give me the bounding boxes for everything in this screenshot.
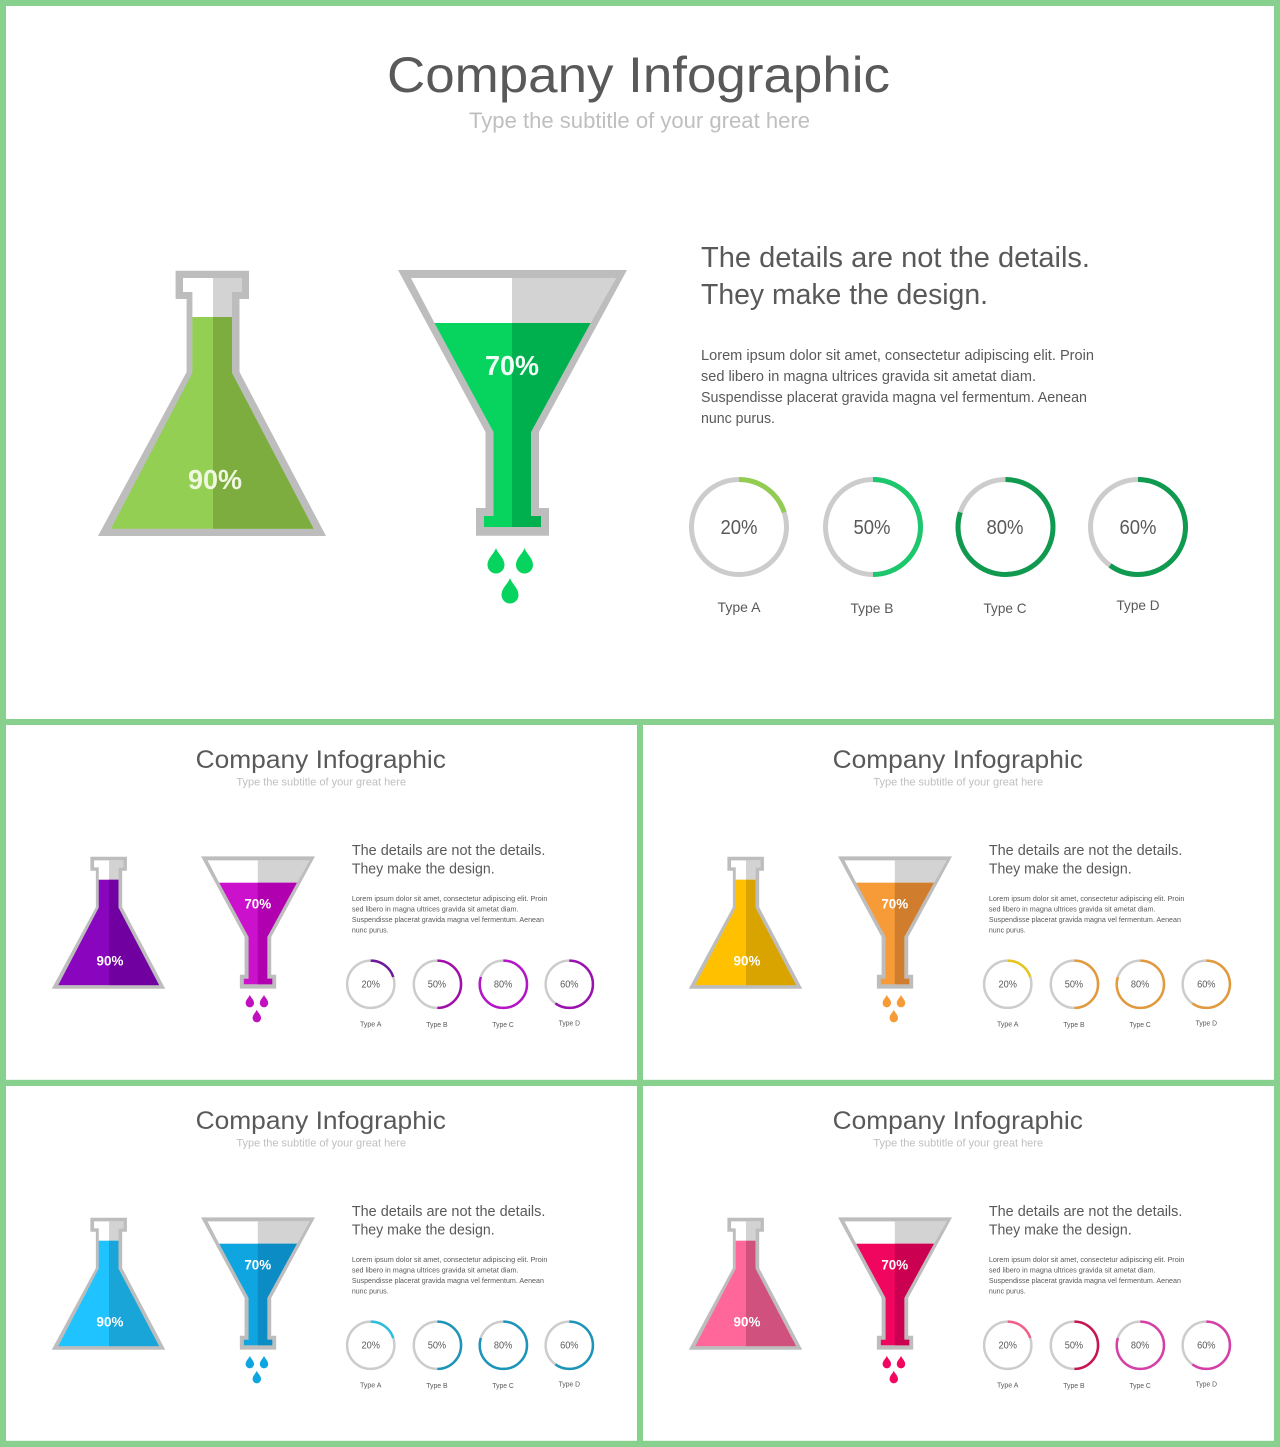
- ring: Type D: Type D: [1196, 1382, 1217, 1389]
- title: Company Infographic: [833, 746, 1083, 774]
- ring: Type C: Type C: [984, 600, 1026, 616]
- body text: nunc purus.: [989, 925, 1026, 934]
- heading: [352, 1204, 545, 1238]
- ring: Type D: 60%: [1197, 1341, 1216, 1352]
- heading: [352, 843, 545, 877]
- icon: flask 90%: [52, 1218, 165, 1350]
- ring: Type A: Type A: [997, 1022, 1019, 1029]
- ring: Type D: [1183, 961, 1230, 1028]
- ring: Type C: [1117, 961, 1164, 1029]
- heading: [989, 843, 1182, 877]
- body text: nunc purus.: [352, 925, 389, 934]
- ring: Type B: Type B: [426, 1383, 448, 1390]
- icon: flask 90%: [689, 1218, 802, 1350]
- icon: flask 90%: [689, 857, 802, 989]
- ring: Type B: 50%: [854, 517, 891, 539]
- ring: Type D: [546, 1322, 593, 1389]
- ring: Type A: 20%: [999, 980, 1017, 991]
- icon: flask 90%: [98, 271, 326, 536]
- ring: Type B: 50%: [1065, 980, 1083, 991]
- title: Company Infographic: [196, 1107, 446, 1135]
- heading: They make the design.: [701, 279, 988, 311]
- title: Company Infographic: [833, 1107, 1083, 1135]
- ring: Type B: 50%: [428, 1341, 446, 1352]
- ring: Type C: Type C: [1129, 1383, 1151, 1390]
- icon: funnel 70%: 70%: [881, 1257, 909, 1273]
- icon: drops: [246, 995, 268, 1022]
- body text: [352, 1255, 547, 1295]
- body text: Lorem ipsum dolor sit amet, consectetur adipiscing elit. Proin: [352, 894, 547, 903]
- icon: funnel 70%: 70%: [881, 896, 909, 912]
- heading: The details are not the details.: [989, 1204, 1182, 1220]
- subtitle: Type the subtitle of your great here: [873, 777, 1043, 789]
- ring: Type C: [480, 961, 527, 1029]
- heading: They make the design.: [352, 861, 495, 877]
- body text: Lorem ipsum dolor sit amet, consectetur adipiscing elit. Proin: [352, 1255, 547, 1264]
- icon: funnel 70%: [838, 856, 952, 989]
- title: Company Infographic: [196, 746, 446, 774]
- heading: They make the design.: [352, 1222, 495, 1238]
- body text: Lorem ipsum dolor sit amet, consectetur adipiscing elit. Proin: [989, 1255, 1184, 1264]
- ring: Type C: [958, 480, 1053, 616]
- body text: nunc purus.: [352, 1286, 389, 1295]
- icon: funnel 70%: [201, 856, 315, 989]
- ring: Type A: [692, 480, 786, 615]
- body text: nunc purus.: [989, 1286, 1026, 1295]
- ring: Type B: Type B: [1063, 1383, 1085, 1390]
- subtitle: Type the subtitle of your great here: [873, 1138, 1043, 1150]
- ring: Type C: Type C: [1129, 1022, 1151, 1029]
- ring: Type A: Type A: [997, 1383, 1019, 1390]
- body text: [989, 894, 1184, 934]
- ring: Type C: [1117, 1322, 1164, 1390]
- icon: drops: [883, 995, 905, 1022]
- ring: Type C: 80%: [986, 517, 1024, 539]
- icon: flask 90%: [52, 857, 165, 989]
- icon: flask 90%: 90%: [734, 952, 761, 968]
- ring: Type D: [1090, 480, 1186, 613]
- title: Company Infographic: [387, 47, 890, 103]
- body text: sed libero in magna ultrices gravida sit ametat diam.: [989, 905, 1156, 914]
- icon: funnel 70%: [398, 270, 627, 536]
- body text: Suspendisse placerat gravida magna vel fermentum. Aenean: [352, 1276, 544, 1285]
- ring: Type D: Type D: [1196, 1021, 1217, 1028]
- ring: Type D: Type D: [1116, 597, 1160, 613]
- ring: Type C: 80%: [1131, 1341, 1149, 1352]
- ring: Type A: Type A: [718, 599, 761, 615]
- ring: Type B: [1051, 961, 1098, 1029]
- subtitle: Type the subtitle of your great here: [236, 1138, 406, 1150]
- body text: Lorem ipsum dolor sit amet, consectetur adipiscing elit. Proin: [989, 894, 1184, 903]
- heading: The details are not the details.: [352, 1204, 545, 1220]
- icon: flask 90%: 90%: [97, 1313, 124, 1329]
- ring: Type B: [1051, 1322, 1098, 1390]
- ring: Type A: [347, 961, 394, 1029]
- icon: water drops: [488, 548, 533, 604]
- body text: sed libero in magna ultrices gravida sit ametat diam.: [352, 905, 519, 914]
- body text: nunc purus.: [701, 411, 775, 427]
- ring: Type C: 80%: [494, 980, 512, 991]
- icon: funnel 70%: 70%: [244, 1257, 272, 1273]
- ring: Type D: 60%: [560, 1341, 579, 1352]
- heading: The details are not the details.: [989, 843, 1182, 859]
- heading: The details are not the details.: [352, 843, 545, 859]
- ring: Type B: [414, 961, 461, 1029]
- heading: [989, 1204, 1182, 1238]
- panel: purple slide: [6, 725, 637, 1080]
- body text: [352, 894, 547, 934]
- heading: [701, 242, 1090, 311]
- body text: sed libero in magna ultrices gravida sit ametat diam.: [701, 369, 1036, 385]
- panel: orange slide: [643, 725, 1274, 1080]
- ring: Type D: [546, 961, 593, 1028]
- heading: They make the design.: [989, 1222, 1132, 1238]
- ring: Type A: 20%: [362, 980, 380, 991]
- body text: Suspendisse placerat gravida magna vel fermentum. Aenean: [989, 915, 1181, 924]
- icon: funnel 70%: 70%: [485, 350, 539, 381]
- subtitle: Type the subtitle of your great here: [469, 108, 810, 133]
- icon: drops: [246, 1356, 268, 1383]
- ring: Type D: 60%: [1197, 980, 1216, 991]
- ring: Type D: 60%: [1120, 517, 1157, 539]
- ring: Type A: Type A: [360, 1383, 382, 1390]
- ring: Type C: Type C: [492, 1383, 514, 1390]
- heading: The details are not the details.: [701, 242, 1090, 274]
- icon: funnel 70%: 70%: [244, 896, 272, 912]
- ring: Type A: 20%: [999, 1341, 1017, 1352]
- subtitle: Type the subtitle of your great here: [236, 777, 406, 789]
- ring: Type A: [984, 961, 1031, 1029]
- icon: drops: [883, 1356, 905, 1383]
- ring: Type A: 20%: [720, 517, 758, 539]
- body text: [989, 1255, 1184, 1295]
- ring: Type B: [826, 480, 920, 616]
- ring: Type C: 80%: [1131, 980, 1149, 991]
- ring: Type D: Type D: [559, 1021, 580, 1028]
- ring: Type B: Type B: [1063, 1022, 1085, 1029]
- body text: Suspendisse placerat gravida magna vel fermentum. Aenean: [352, 915, 544, 924]
- panel: pink slide: [643, 1086, 1274, 1441]
- icon: flask 90%: 90%: [734, 1313, 761, 1329]
- ring: Type C: Type C: [492, 1022, 514, 1029]
- body text: Suspendisse placerat gravida magna vel fermentum. Aenean: [989, 1276, 1181, 1285]
- ring: Type B: 50%: [428, 980, 446, 991]
- icon: funnel 70%: [201, 1217, 315, 1350]
- ring: Type C: [480, 1322, 527, 1390]
- ring: Type D: 60%: [560, 980, 579, 991]
- ring: Type A: 20%: [362, 1341, 380, 1352]
- ring: Type D: Type D: [559, 1382, 580, 1389]
- icon: flask 90%: 90%: [188, 464, 242, 495]
- heading: They make the design.: [989, 861, 1132, 877]
- ring: Type B: [414, 1322, 461, 1390]
- ring: Type A: [984, 1322, 1031, 1390]
- ring: Type A: [347, 1322, 394, 1390]
- panel: blue slide: [6, 1086, 637, 1441]
- ring: Type B: 50%: [1065, 1341, 1083, 1352]
- icon: flask 90%: 90%: [97, 952, 124, 968]
- ring: Type B: Type B: [426, 1022, 448, 1029]
- ring: Type B: Type B: [850, 600, 894, 616]
- ring: Type A: Type A: [360, 1022, 382, 1029]
- icon: funnel 70%: [838, 1217, 952, 1350]
- body text: sed libero in magna ultrices gravida sit ametat diam.: [989, 1266, 1156, 1275]
- body text: Lorem ipsum dolor sit amet, consectetur adipiscing elit. Proin: [701, 348, 1094, 364]
- ring: Type D: [1183, 1322, 1230, 1389]
- body text: sed libero in magna ultrices gravida sit ametat diam.: [352, 1266, 519, 1275]
- body text: Suspendisse placerat gravida magna vel fermentum. Aenean: [701, 390, 1087, 406]
- ring: Type C: 80%: [494, 1341, 512, 1352]
- body text: [701, 348, 1094, 427]
- panel: main green slide: [6, 6, 1274, 719]
